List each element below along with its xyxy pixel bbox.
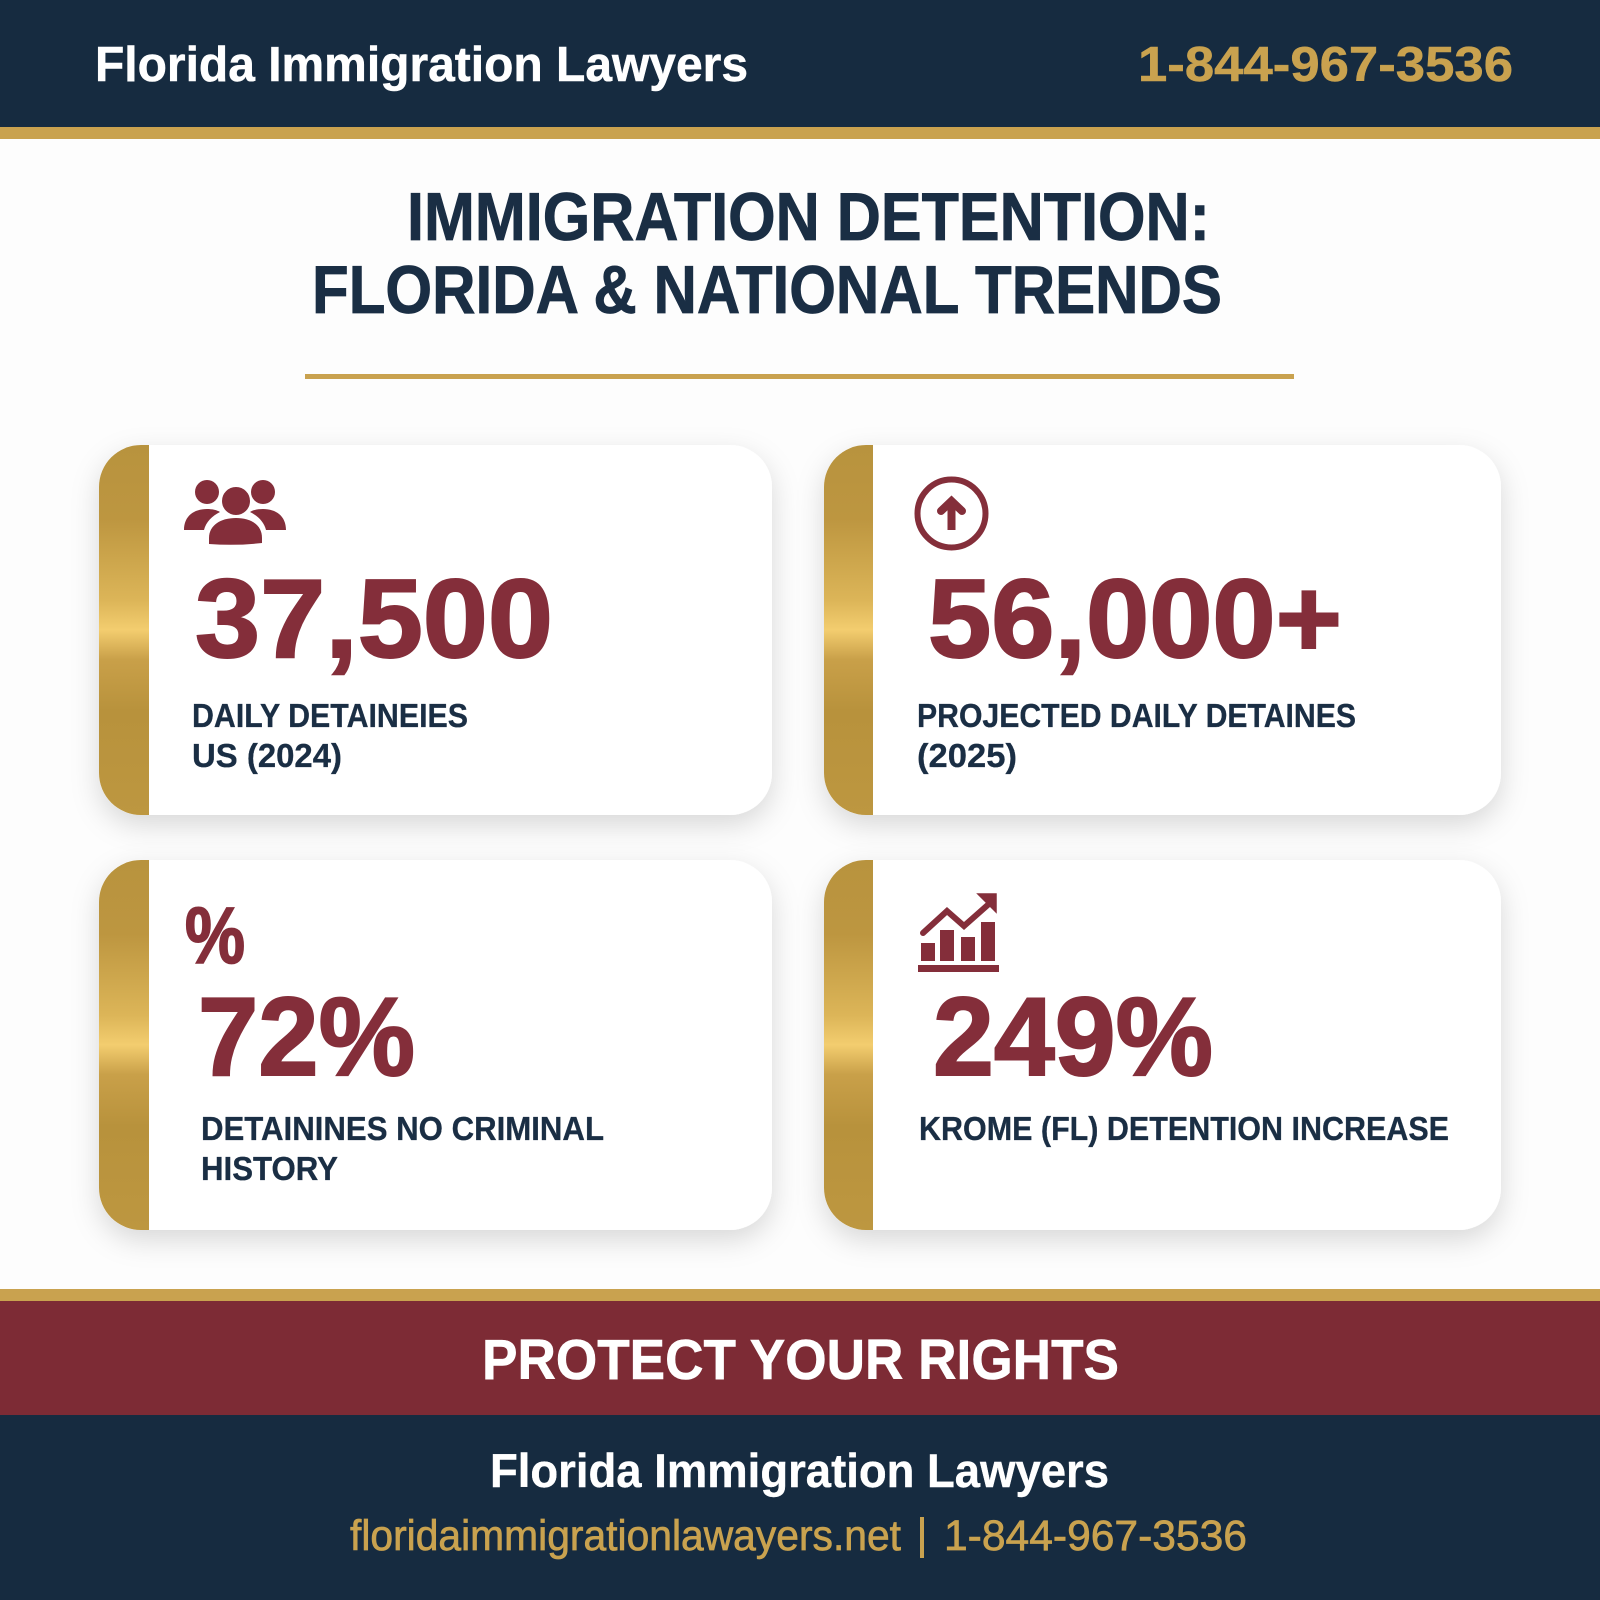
stat label: DETAININES NO CRIMINAL (201, 1110, 604, 1147)
footer website: floridaimmigrationlawayers.net (350, 1512, 901, 1560)
stat label: US (2024) (192, 737, 342, 774)
stat label (917, 697, 1356, 774)
stat value: 56,000+ (928, 557, 1342, 681)
panel: daily detainees US 2024 (99, 445, 772, 815)
call to action banner (0, 1289, 1600, 1415)
title: FLORIDA & NATIONAL TRENDS (312, 252, 1222, 328)
stat label: HISTORY (201, 1150, 338, 1187)
footer separator (920, 1517, 924, 1558)
stat value: 249% (933, 975, 1213, 1099)
call to action banner: PROTECT YOUR RIGHTS (482, 1328, 1119, 1392)
icon: group of people (184, 480, 286, 545)
stat label: DAILY DETAINEIES (192, 697, 468, 734)
stat value: 72% (198, 975, 415, 1099)
stat value: 37,500 (195, 557, 553, 681)
stat label: (2025) (917, 737, 1017, 774)
panel: Krome detention increase (824, 860, 1501, 1230)
header phone number: 1-844-967-3536 (1138, 38, 1513, 92)
header bar (0, 0, 1600, 139)
panel: detainees no criminal history (99, 860, 772, 1230)
title (312, 179, 1222, 328)
footer firm name: Florida Immigration Lawyers (490, 1444, 1109, 1497)
footer phone number: 1-844-967-3536 (944, 1512, 1247, 1560)
stat label (192, 697, 468, 774)
panel: projected daily detainees 2025 (824, 445, 1501, 815)
stat label: PROJECTED DAILY DETAINES (917, 697, 1356, 734)
icon: rising bar chart (918, 894, 999, 972)
stat label (201, 1110, 604, 1187)
icon: percent sign: % (185, 891, 245, 980)
title: IMMIGRATION DETENTION: (407, 179, 1210, 255)
icon: up arrow in circle (918, 480, 986, 548)
stat label: KROME (FL) DETENTION INCREASE (919, 1110, 1449, 1147)
title underline (305, 374, 1294, 379)
footer (0, 1415, 1600, 1600)
header firm name: Florida Immigration Lawyers (95, 38, 748, 92)
